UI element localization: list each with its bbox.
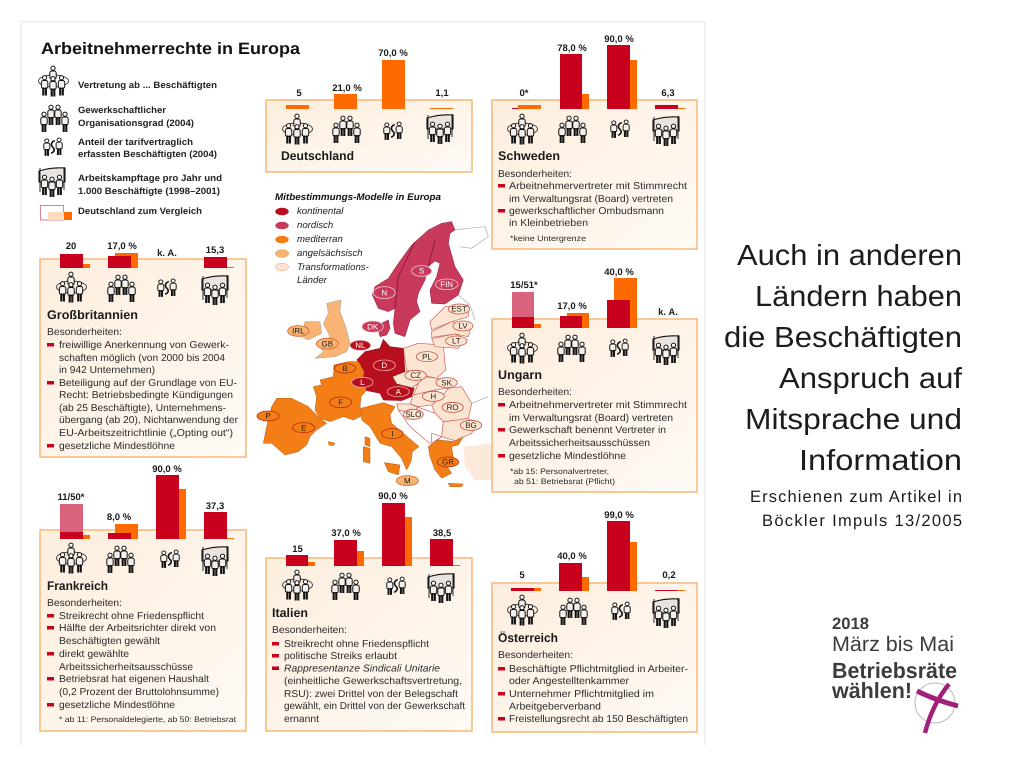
bar chart: Österreich: 40,0 % (557, 551, 587, 562)
text block: Italien: RSU): zwei Drittel von der Belegschaft (284, 689, 458, 700)
side note (750, 488, 962, 530)
bar chart: Schweden: 78,0 % (557, 43, 587, 54)
panel: Italien (266, 491, 472, 731)
text block: Frankreich: Betriebsrat hat eigenen Haushalt (59, 674, 209, 685)
map legend: nordisch (297, 220, 333, 231)
text block: Schweden: Arbeitnehmervertreter mit Stimmrecht (509, 181, 687, 192)
text block: Österreich: Freistellungsrecht ab 150 Beschäftigten (509, 714, 688, 725)
side heading: Information (799, 445, 962, 477)
text block: Frankreich: Beschäftigten gewählt (59, 636, 160, 647)
text block: Italien: Rappresentanze Sindicali Unitarie (284, 664, 440, 674)
legend item: representation: Vertretung ab ... Beschäftigten (78, 80, 217, 90)
panel: Schweden (492, 34, 697, 249)
heading: Deutschland: Deutschland (281, 149, 354, 163)
text block: Ungarn: *ab 15: Personalvertreter, (510, 467, 609, 476)
bar chart: Schweden: 6,3 (661, 88, 675, 99)
map legend: Länder (297, 275, 328, 286)
bar chart: Schweden: 90,0 % (604, 34, 634, 45)
icons: Deutschland (282, 114, 453, 144)
bar chart: Frankreich: 37,3 (206, 501, 224, 512)
icons: Österreich (508, 595, 679, 628)
bar chart: Großbritannien: 20 (66, 241, 76, 252)
map legend: Transformations- (297, 262, 369, 273)
text block: Großbritannien: schaften möglich (von 2000 bis 2004 (59, 353, 225, 364)
text block: Schweden: *keine Untergrenze (510, 234, 587, 243)
icons: Italien (282, 570, 454, 603)
panel: Ungarn (492, 267, 697, 492)
country codes: RO (447, 403, 459, 412)
bar chart: Frankreich: 8,0 % (107, 512, 132, 523)
text block: Frankreich: (0,2 Prozent der Bruttolohnsumme) (59, 687, 219, 698)
icons: Ungarn (508, 333, 679, 365)
bar chart: Österreich: 5 (519, 570, 525, 581)
text block: Italien: ernannt (284, 714, 319, 725)
side heading: Anspruch auf (779, 363, 963, 395)
text block: Frankreich: Besonderheiten: (47, 598, 122, 609)
country codes: NL (355, 341, 365, 350)
legend item: collective agreement: erfassten Beschäftigten (2004) (78, 149, 217, 159)
text block: Italien: Streikrecht ohne Friedenspflicht (284, 639, 429, 650)
text block: Schweden: im Verwaltungsrat (Board) vertreten (509, 194, 673, 205)
legend item: collective agreement (44, 137, 217, 159)
text block: Schweden: gewerkschaftlicher Ombudsmann (509, 206, 664, 217)
heading: Schweden: Schweden (498, 149, 560, 163)
side note: Böckler Impuls 13/2005 (762, 512, 962, 530)
panel: Österreich (492, 510, 697, 732)
text block: Österreich: Besonderheiten: (498, 650, 573, 661)
icons: Schweden (508, 114, 679, 146)
logo: Betriebsräte wählen (831, 615, 958, 733)
heading: Großbritannien: Großbritannien (47, 308, 138, 322)
country codes: SK (441, 378, 452, 387)
map legend (275, 192, 442, 286)
map legend: mediterran (297, 234, 343, 245)
text block: Großbritannien: Recht: Betriebsbedingte Kündigungen (59, 390, 233, 401)
legend item: Germany comparison (40, 206, 202, 220)
bar chart: Großbritannien: k. A. (157, 248, 177, 259)
text block: Frankreich: * ab 11: Personaldelegierte, ab 50: Betriebsrat (59, 715, 237, 724)
bar chart: Italien (286, 491, 460, 566)
legend item: Germany comparison: Deutschland zum Vergleich (78, 206, 202, 216)
panel: Großbritannien (40, 241, 246, 457)
bar chart: Ungarn: 15/51* (510, 280, 538, 291)
text block: Ungarn: gesetzliche Mindestlöhne (509, 451, 626, 462)
text block: Großbritannien: in 942 Unternehmen) (59, 365, 155, 376)
legend item: union density (41, 105, 194, 132)
panel: Deutschland (266, 48, 472, 172)
text block: Großbritannien: gesetzliche Mindestlöhne (59, 441, 175, 452)
map legend: kontinental (297, 206, 344, 217)
country codes: FIN (440, 280, 453, 289)
country codes: LT (452, 337, 461, 346)
bar chart: Italien: 90,0 % (378, 491, 408, 502)
country codes: D (381, 361, 387, 370)
country codes: N (381, 288, 387, 297)
heading: Italien: Italien (272, 606, 308, 620)
heading: Ungarn: Ungarn (498, 368, 542, 382)
text block: Großbritannien: EU-Arbeitszeitrichtlinie („Opting out“) (59, 428, 233, 439)
text block: Großbritannien: übergang (ab 20), Nichtanwendung der (59, 415, 239, 426)
country codes: DK (367, 322, 378, 331)
country codes: LV (458, 322, 468, 331)
text block: Schweden: Besonderheiten: (498, 169, 572, 180)
logo: Betriebsräte wählen: wählen! (831, 678, 912, 703)
bar chart: Deutschland: 1,1 (435, 88, 449, 99)
legend item: strike days (39, 167, 222, 197)
title: Arbeitnehmerrechte in Europa (41, 40, 301, 58)
bar chart: Italien: 37,0 % (331, 528, 361, 539)
text block: Ungarn: im Verwaltungsrat (Board) vertreten (509, 413, 673, 424)
legend item: strike days: Arbeitskampftage pro Jahr und (78, 173, 222, 183)
icons: Frankreich (56, 543, 228, 576)
country labels (257, 266, 482, 486)
legend item: union density: Gewerkschaftlicher (78, 105, 166, 115)
text block: Österreich: Beschäftigte Pflichtmitglied in Arbeiter- (509, 664, 688, 675)
logo: Betriebsräte wählen: März bis Mai (832, 633, 954, 656)
country codes: H (430, 392, 436, 401)
bar chart: Österreich: 99,0 % (604, 510, 634, 521)
text block: Frankreich: direkt gewählte (59, 649, 129, 660)
legend item: representation (38, 66, 217, 96)
text block: Frankreich: Streikrecht ohne Friedenspflicht (59, 611, 204, 622)
side heading: Mitsprache und (745, 404, 962, 436)
side note: Erschienen zum Artikel in (750, 488, 962, 506)
text block: Großbritannien: (ab 25 Beschäftigte), Unternehmens- (59, 403, 226, 414)
country codes: L (360, 378, 365, 387)
country codes (265, 267, 477, 485)
country codes: S (419, 267, 424, 276)
bar chart: Schweden: 0* (520, 88, 529, 99)
Balkans (398, 407, 443, 445)
legend item: strike days: 1.000 Beschäftigte (1998–2001) (78, 186, 220, 196)
country codes: M (404, 476, 411, 485)
bar chart: Deutschland: 70,0 % (378, 48, 408, 59)
bar chart: Ungarn: k. A. (658, 307, 678, 318)
Mediterranean countries (263, 362, 463, 487)
icon: ballot cross (915, 683, 958, 733)
bar chart: Deutschland: 5 (296, 88, 302, 99)
text block: Österreich: oder Angestelltenkammer (509, 676, 630, 687)
country codes: PL (422, 352, 432, 361)
text block: Österreich: Unternehmer Pflichtmitglied im (509, 689, 654, 700)
bar chart: Frankreich: 90,0 % (152, 464, 182, 475)
text block: Frankreich: gesetzliche Mindestlöhne (59, 700, 175, 711)
text block: Schweden: in Kleinbetrieben (509, 218, 588, 229)
logo: Betriebsräte wählen: 2018 (832, 615, 869, 633)
text block: Frankreich: Hälfte der Arbeitsrichter direkt von (59, 623, 216, 634)
country codes: IRL (292, 327, 305, 336)
Anglo-Saxon countries (302, 300, 350, 358)
bar chart: Frankreich: 11/50* (58, 492, 85, 503)
bar chart: Großbritannien (60, 241, 234, 268)
text block: Österreich (498, 650, 688, 725)
Turkey (463, 443, 495, 480)
text block: Frankreich (47, 598, 237, 724)
bar chart: Österreich: 0,2 (662, 570, 676, 581)
legend item: union density: Organisationsgrad (2004) (78, 118, 194, 128)
bar chart: Deutschland (286, 48, 453, 109)
country codes: A (396, 387, 401, 396)
map legend: angelsächsisch (297, 248, 363, 259)
country codes: CZ (410, 371, 421, 380)
country codes: SLO (405, 410, 421, 419)
heading: Frankreich: Frankreich (47, 579, 108, 593)
bar chart: Ungarn: 40,0 % (604, 267, 634, 278)
surrounding outlines (455, 227, 488, 403)
bar chart: Italien: 38,5 (433, 528, 452, 539)
text block: Großbritannien: Besonderheiten: (47, 327, 122, 338)
text block: Italien: gewählt, ein Drittel von der Gewerkschaft (284, 701, 465, 712)
logo: Betriebsräte wählen: Betriebsräte (832, 658, 957, 683)
bar chart: Italien: 15 (292, 544, 303, 555)
text block: Ungarn: ab 51: Betriebsrat (Pflicht) (514, 477, 615, 486)
country codes: GR (442, 458, 454, 467)
heading: Österreich: Österreich (498, 631, 558, 645)
bar chart: Schweden (512, 34, 685, 109)
text block: Ungarn: Arbeitnehmervertreter mit Stimmrecht (509, 400, 687, 411)
text block: Ungarn: Gewerkschaft benennt Vertreter in (509, 425, 666, 436)
icons: Großbritannien (56, 272, 228, 305)
text block: Ungarn (498, 387, 687, 486)
text block: Italien: Besonderheiten: (272, 625, 347, 636)
text block: Ungarn: Arbeitssicherheitsausschüssen (509, 438, 650, 449)
legend: icons (38, 66, 222, 220)
bar chart: Großbritannien: 17,0 % (107, 241, 137, 252)
bar chart: Österreich (511, 510, 685, 591)
map legend: Mitbestimmungs-Modelle in Europa (275, 192, 442, 203)
side heading: Ländern haben (755, 281, 962, 313)
country codes: P (265, 412, 271, 421)
country codes: F (338, 398, 343, 407)
country codes: B (342, 364, 348, 373)
bar chart: Ungarn (510, 267, 678, 328)
text block: Ungarn: Besonderheiten: (498, 387, 572, 398)
text block: Großbritannien: freiwillige Anerkennung von Gewerk- (59, 340, 229, 351)
bar chart: Deutschland: 21,0 % (332, 83, 362, 94)
legend item: collective agreement: Anteil der tarifvertraglich (78, 137, 193, 147)
bar chart: Ungarn: 17,0 % (557, 301, 587, 312)
text block: Österreich: Arbeitgeberverband (509, 702, 601, 712)
country codes: E (301, 423, 306, 432)
country codes: GB (322, 339, 333, 348)
panel: Frankreich (40, 464, 246, 731)
Nordic countries (372, 222, 463, 337)
text block: Frankreich: Arbeitssicherheitsausschüsse (59, 662, 193, 673)
country codes: BG (465, 421, 477, 430)
map of Europe (257, 222, 495, 487)
side heading (724, 240, 963, 477)
text block: Italien: (einheitliche Gewerkschaftsvertretung, (284, 676, 462, 687)
side heading: die Beschäftigten (724, 322, 962, 354)
text block: Großbritannien (47, 327, 239, 452)
bar chart: Großbritannien: 15,3 (206, 245, 224, 256)
infographic frame (21, 22, 705, 745)
country codes: EST (451, 305, 467, 314)
text block: Italien (272, 625, 465, 725)
text block: Großbritannien: Beteiligung auf der Grundlage von EU- (59, 378, 237, 389)
text block: Italien: politische Streiks erlaubt (284, 651, 397, 662)
Transformation countries (392, 305, 477, 441)
country codes: I (391, 429, 393, 438)
text block: Schweden (498, 169, 687, 243)
Continental countries (357, 339, 414, 401)
bar chart: Frankreich (58, 464, 234, 539)
side heading: Auch in anderen (737, 240, 962, 272)
